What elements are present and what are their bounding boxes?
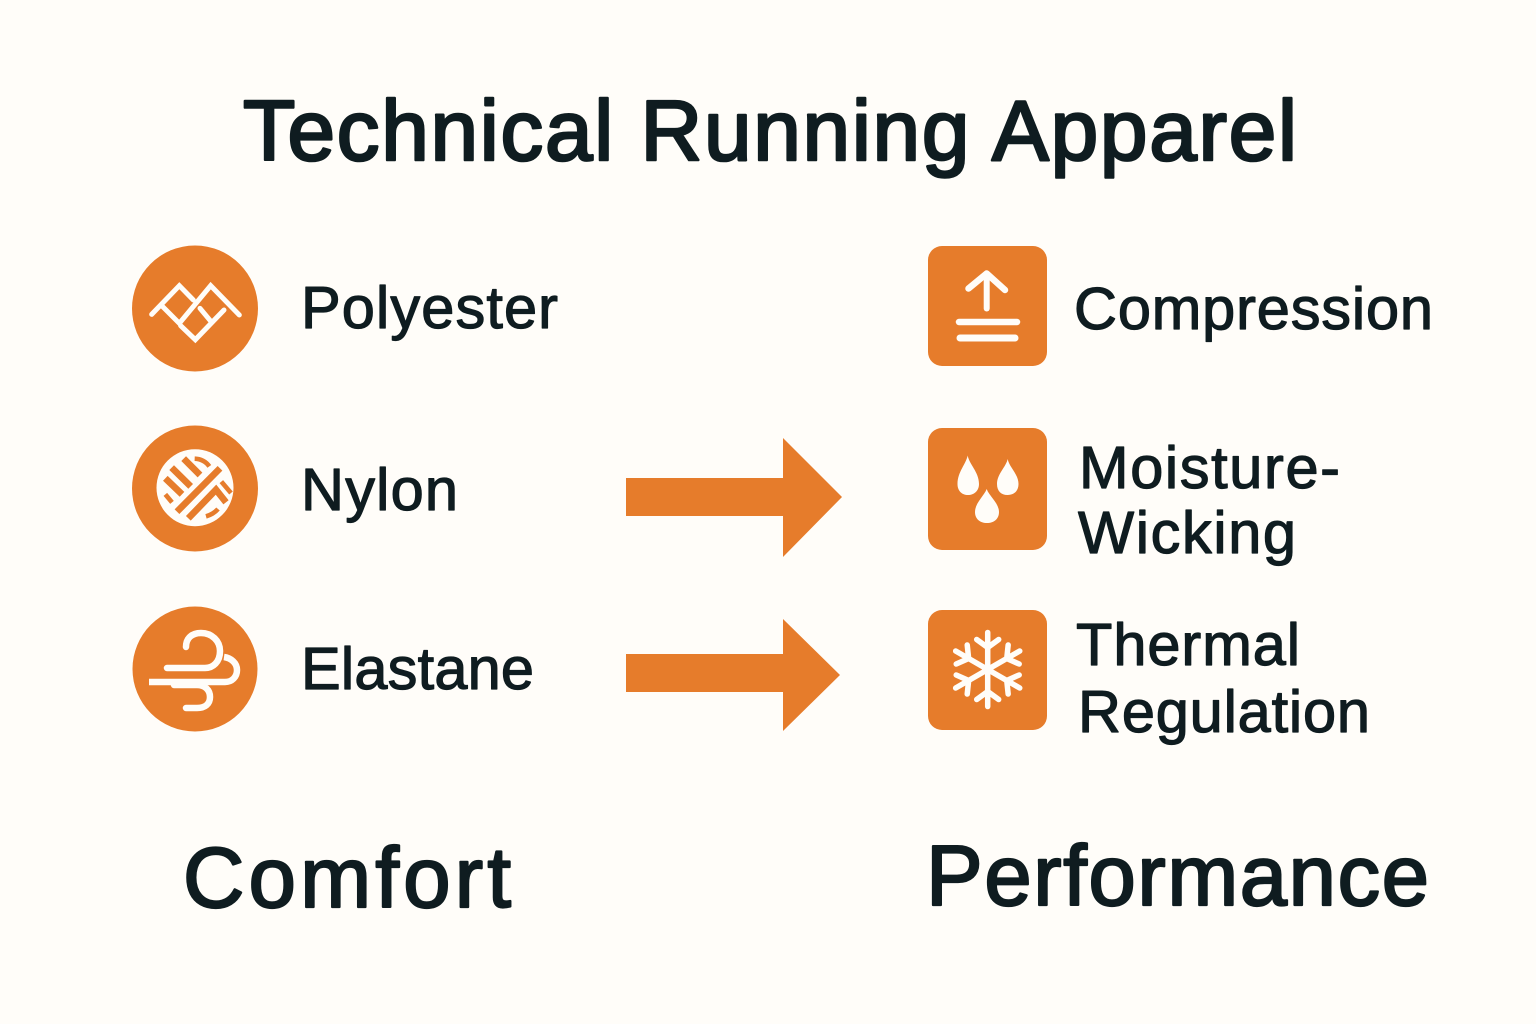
icon: nylon yarn: [132, 426, 258, 552]
label: Polyester: Polyester: [301, 274, 558, 341]
arrow: upper: [626, 438, 842, 557]
label: Thermal Regulation: Thermal: [1076, 611, 1300, 678]
label: Thermal Regulation: Regulation: [1078, 678, 1370, 745]
title: Technical Running Apparel: [243, 84, 1297, 179]
label: Moisture-Wicking: Moisture-: [1079, 434, 1340, 501]
label: Nylon: Nylon: [301, 456, 458, 523]
row: Compression: [928, 246, 1433, 366]
row: Moisture-Wicking: [928, 428, 1340, 566]
row: Elastane: [132, 606, 534, 732]
heading: Comfort: Comfort: [183, 831, 511, 926]
icon: water drops: [928, 428, 1047, 550]
row: Thermal Regulation: [928, 610, 1370, 745]
label: Moisture-Wicking: [1078, 434, 1340, 566]
label: Compression: Compression: [1074, 275, 1433, 342]
heading: Performance: Performance: [926, 829, 1429, 924]
row: Polyester: [132, 246, 558, 372]
icon: wind: [132, 606, 258, 732]
icon: compression arrow: [928, 246, 1047, 366]
arrow: lower: [626, 619, 840, 731]
icon: snowflake: [928, 610, 1047, 730]
label: Elastane: Elastane: [301, 635, 534, 702]
row: Nylon: [132, 426, 458, 552]
label: Thermal Regulation: [1076, 611, 1370, 745]
icon: polyester weave: [132, 246, 258, 372]
label: Moisture-Wicking: Wicking: [1078, 499, 1296, 566]
